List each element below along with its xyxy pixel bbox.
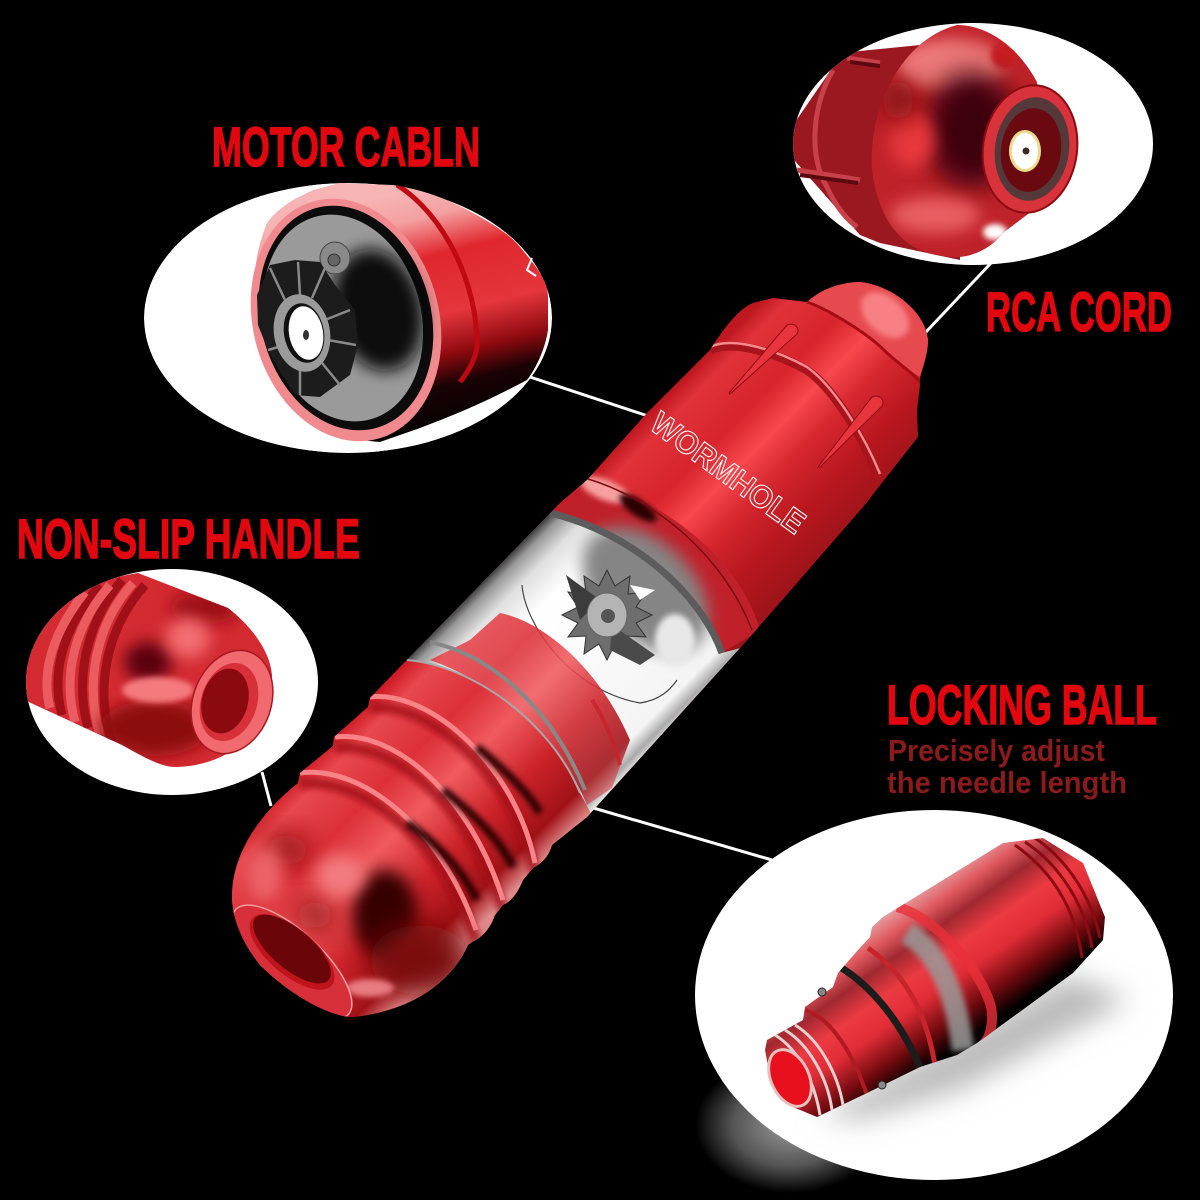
text: locking ball description	[887, 733, 1127, 800]
panel: locking ball detail	[695, 810, 1173, 1180]
logo fragment on motor cap	[527, 258, 536, 276]
icon: handle bore	[177, 639, 287, 765]
icon: needle mouth	[760, 1043, 820, 1113]
icon: screw	[320, 242, 350, 274]
pen body ring	[550, 471, 760, 653]
pen inner red section	[430, 613, 630, 805]
main product: tattoo pen	[232, 282, 928, 1017]
panel: motor detail	[144, 170, 560, 463]
icon: locking balls	[818, 988, 886, 1089]
connector lines	[262, 262, 992, 860]
text: locking ball description: Precisely adjust	[888, 733, 1105, 768]
pen nozzle	[234, 904, 353, 1016]
panel: rca detail	[780, 20, 1153, 265]
pen clear window	[380, 510, 740, 826]
heading: motor cable: MOTOR CABLN	[212, 115, 480, 178]
dome reflections	[247, 834, 470, 997]
icon: rca socket	[975, 79, 1085, 219]
pen logo: wormhole: WORMHOLE	[644, 405, 812, 541]
icon: fan in window	[562, 570, 655, 665]
glow below locking ball panel	[695, 1057, 885, 1193]
pen rear cap	[710, 282, 928, 504]
text: locking ball description: the needle length	[887, 765, 1127, 800]
heading: non-slip handle: NON-SLIP HANDLE	[17, 507, 360, 570]
panel: handle detail	[15, 569, 318, 795]
pen clips	[729, 324, 883, 467]
pen upper body	[232, 282, 928, 1017]
icon: fan gear	[257, 260, 358, 397]
pen grip	[232, 659, 591, 1017]
grip ridges	[300, 697, 540, 941]
